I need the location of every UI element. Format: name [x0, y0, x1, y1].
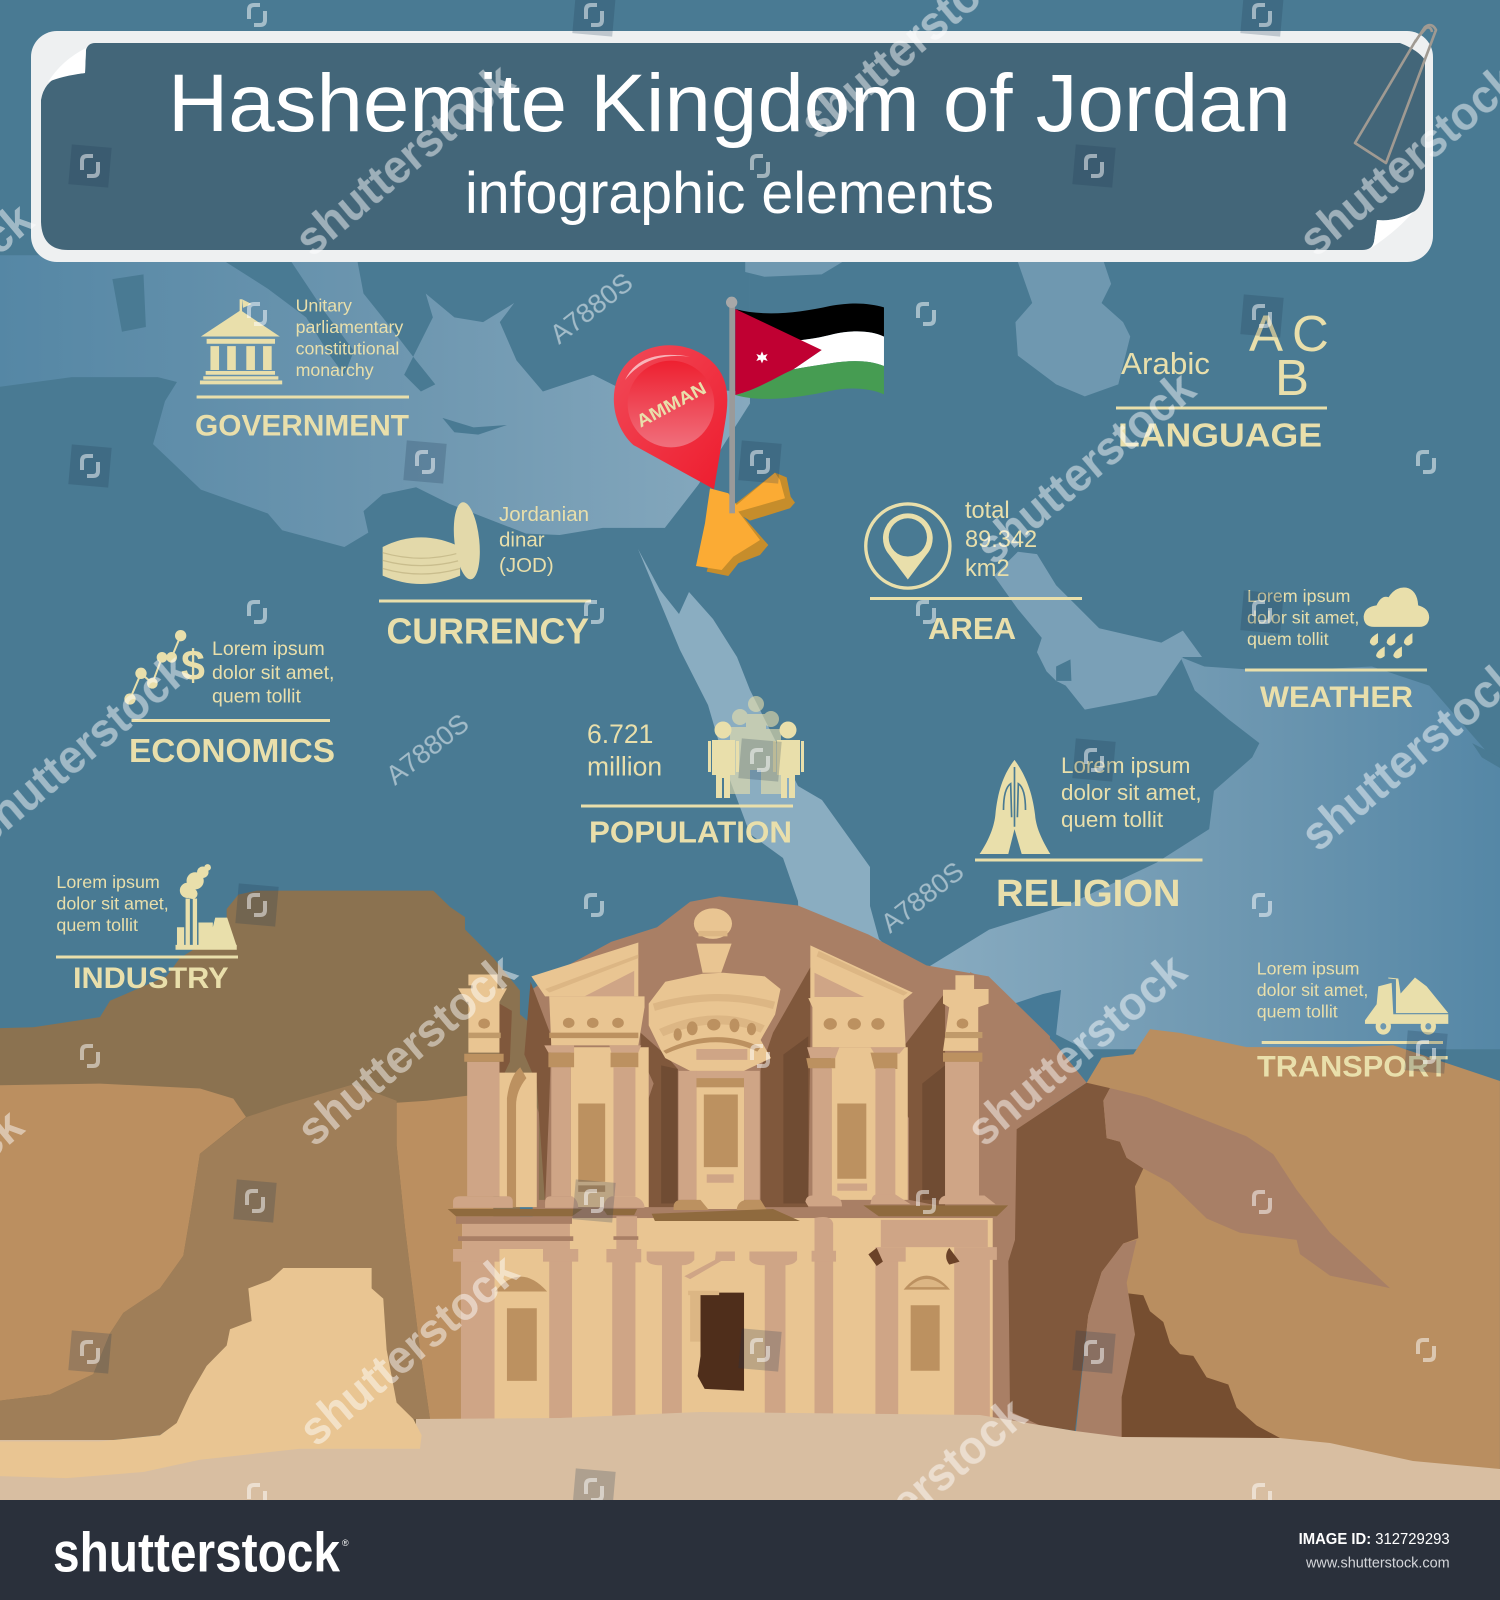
- panel: government: [195, 296, 409, 442]
- title banner: [31, 25, 1436, 262]
- panel: weather: [1245, 586, 1429, 714]
- stock watermark: shutterstock: [796, 1386, 1036, 1600]
- landscape: right rocks: [970, 972, 1500, 1476]
- stock watermark: A7880S: [544, 267, 638, 350]
- religion text: Lorem ipsum: [1061, 753, 1190, 778]
- panel: transport: [1257, 959, 1448, 1083]
- transport text: quem tollit: [1257, 1002, 1338, 1022]
- icon: chart with dollar: [124, 630, 205, 705]
- icon: coins: [383, 501, 483, 584]
- panel: population: [581, 696, 804, 850]
- icon: praying hands: [980, 760, 1050, 854]
- stock watermark: shutterstock: [286, 942, 526, 1156]
- image id: IMAGE ID: 312729293: [1299, 1531, 1450, 1548]
- stock watermark: shutterstock: [284, 52, 524, 266]
- government heading: GOVERNMENT: [195, 410, 409, 442]
- area text: total: [965, 498, 1010, 524]
- ground: [0, 1412, 1500, 1500]
- icon: letters ABC: [1249, 305, 1329, 406]
- economics text: dolor sit amet,: [212, 662, 334, 684]
- Amman location pin: [614, 345, 727, 489]
- population heading: POPULATION: [589, 815, 792, 850]
- temple cornices: [448, 1205, 1008, 1221]
- weather text: quem tollit: [1247, 629, 1329, 649]
- footer bar: ®: [342, 1538, 349, 1548]
- religion heading: RELIGION: [996, 873, 1180, 915]
- icon: rain cloud: [1364, 587, 1429, 658]
- stock watermark: shutterstock: [965, 360, 1205, 574]
- temple lower storey: [453, 1216, 997, 1422]
- transport heading: TRANSPORT: [1257, 1050, 1448, 1083]
- temple left pediment and bay: [531, 943, 649, 1208]
- currency text: (JOD): [499, 554, 554, 577]
- currency text: dinar: [499, 528, 545, 552]
- icon: dump truck: [1365, 977, 1448, 1035]
- Jordanian flag: [726, 297, 884, 513]
- weather heading: WEATHER: [1260, 681, 1413, 714]
- industry text: quem tollit: [56, 915, 138, 935]
- economics heading: ECONOMICS: [129, 732, 335, 769]
- government text: parliamentary: [296, 317, 403, 337]
- sandstone boulder: [0, 1268, 422, 1478]
- industry text: Lorem ipsum: [56, 872, 160, 892]
- icon: letters ABC: A: [1249, 305, 1283, 362]
- temple mountain: [499, 896, 1050, 1425]
- currency text: Jordanian: [499, 503, 589, 526]
- religion text: quem tollit: [1061, 807, 1164, 832]
- panel: economics: [124, 630, 335, 769]
- economics text: quem tollit: [212, 686, 301, 708]
- temple central tholos: [649, 908, 781, 1210]
- subtitle text: infographic elements: [465, 161, 994, 226]
- panel: industry: [56, 864, 238, 995]
- language text: Arabic: [1121, 346, 1210, 381]
- icon: people: [708, 696, 804, 798]
- icon: government building: [200, 299, 282, 384]
- website: www.shutterstock.com: [1305, 1556, 1450, 1572]
- title text: Hashemite Kingdom of Jordan: [168, 58, 1291, 149]
- map of the region: [0, 255, 1500, 1049]
- economics text: Lorem ipsum: [212, 638, 325, 660]
- stock watermark: shutterstock: [288, 1242, 528, 1456]
- language heading: LANGUAGE: [1118, 416, 1322, 454]
- landscape: left rocks: [0, 891, 520, 1441]
- icon: paperclip: [1355, 25, 1436, 163]
- temple left tower: [453, 975, 537, 1208]
- right cliff details: [1008, 1083, 1390, 1440]
- area text: km2: [965, 556, 1010, 582]
- panel: area: [866, 498, 1082, 646]
- panel: currency: [379, 501, 591, 652]
- government text: monarchy: [296, 360, 374, 380]
- icon: letters ABC: C: [1292, 305, 1329, 362]
- Jordan country map: [696, 473, 795, 576]
- temple right pediment and bay: [805, 945, 913, 1206]
- population text: 6.721: [587, 719, 653, 749]
- government text: Unitary: [296, 296, 352, 316]
- stock watermark: A7880S: [380, 708, 474, 791]
- transport text: dolor sit amet,: [1257, 980, 1368, 1000]
- temple right tower: [939, 975, 996, 1204]
- stock watermark: shutterstock: [956, 942, 1196, 1156]
- currency heading: CURRENCY: [386, 611, 589, 652]
- temple: Ad Deir facade: [448, 908, 1008, 1422]
- transport text: Lorem ipsum: [1257, 959, 1359, 979]
- government text: constitutional: [296, 339, 399, 359]
- Amman location pin: AMMAN: [633, 378, 709, 431]
- stock watermark: A7880S: [875, 856, 969, 939]
- weather text: dolor sit amet,: [1247, 608, 1359, 628]
- population text: million: [587, 752, 662, 782]
- icon: factory: [176, 864, 237, 950]
- footer bar: [0, 1500, 1500, 1600]
- panel: language: [1116, 305, 1329, 454]
- area text: 89.342: [965, 527, 1037, 553]
- icon: area pin: [866, 504, 950, 588]
- weather text: Lorem ipsum: [1247, 586, 1350, 606]
- footer logo: shutterstock: [53, 1521, 341, 1584]
- area heading: AREA: [928, 611, 1016, 646]
- icon: letters ABC: B: [1275, 349, 1309, 406]
- industry text: dolor sit amet,: [56, 894, 169, 914]
- industry heading: INDUSTRY: [73, 962, 229, 995]
- panel: religion: [975, 753, 1202, 915]
- religion text: dolor sit amet,: [1061, 780, 1202, 805]
- icon: chart with dollar: $: [181, 642, 205, 690]
